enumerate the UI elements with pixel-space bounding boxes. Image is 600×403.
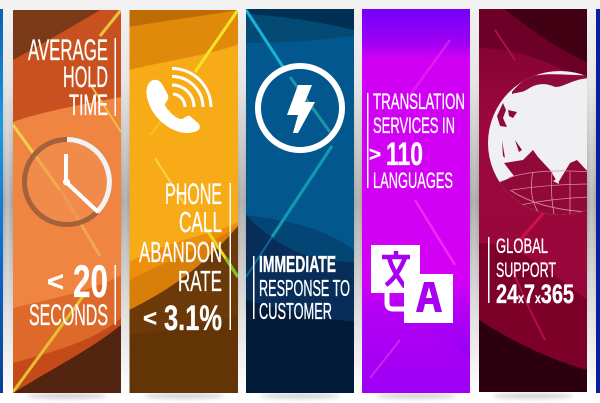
panel: translation services — [362, 9, 470, 393]
streaks — [370, 40, 455, 378]
panel: global support — [479, 9, 587, 392]
stat: phone call abandon rate: RATE — [178, 266, 222, 298]
stat: under 20 seconds: 20 — [73, 256, 108, 307]
streaks — [246, 10, 332, 277]
text: immediate response to customer: IMMEDIATE — [259, 251, 336, 277]
stat: phone call abandon rate: 3.1% — [164, 299, 222, 338]
panel shadows — [27, 394, 573, 398]
streaks — [495, 30, 546, 340]
stat: phone call abandon rate — [139, 178, 231, 338]
stat: phone call abandon rate: CALL — [179, 207, 222, 239]
panel: right edge — [596, 9, 600, 393]
stat: under 20 seconds: < — [47, 266, 64, 297]
panel: phone call abandon rate — [129, 10, 239, 393]
streaks — [13, 10, 121, 392]
heading: average hold time: TIME — [69, 89, 108, 122]
text: immediate response to customer — [253, 251, 350, 324]
heading: average hold time: HOLD — [63, 61, 108, 94]
text: global support: 24x7x365 — [496, 279, 574, 309]
text: translation services: > — [369, 144, 381, 166]
text: translation services: 110 — [386, 136, 423, 172]
icon: lightning bolt — [258, 66, 342, 150]
panel: immediate response — [246, 9, 354, 393]
icon: translate — [371, 245, 453, 323]
stat: under 20 seconds: SECONDS — [29, 299, 108, 332]
stat: phone call abandon rate: ABANDON — [139, 237, 222, 269]
icon: globe — [488, 71, 587, 215]
icon: phone — [146, 68, 211, 133]
text: global support: GLOBAL — [496, 235, 548, 258]
streaks — [150, 10, 238, 277]
text: translation services: SERVICES IN — [373, 113, 455, 138]
text: immediate response to customer: CUSTOMER — [259, 298, 332, 324]
text: translation services — [367, 89, 465, 193]
text: immediate response to customer: RESPONSE TO — [259, 275, 350, 301]
text: global support: SUPPORT — [496, 259, 556, 282]
text: global support — [488, 235, 574, 309]
stat: phone call abandon rate: < — [143, 305, 157, 331]
icon: clock — [24, 140, 110, 224]
stat: under 20 seconds — [29, 256, 116, 332]
stat: phone call abandon rate: PHONE — [165, 178, 222, 211]
heading: average hold time — [28, 34, 116, 122]
heading: average hold time: AVERAGE — [28, 34, 108, 67]
panel: left edge — [0, 9, 3, 393]
text: translation services: LANGUAGES — [373, 168, 453, 193]
text: translation services: TRANSLATION — [373, 89, 465, 114]
panel: average hold time — [13, 10, 121, 393]
